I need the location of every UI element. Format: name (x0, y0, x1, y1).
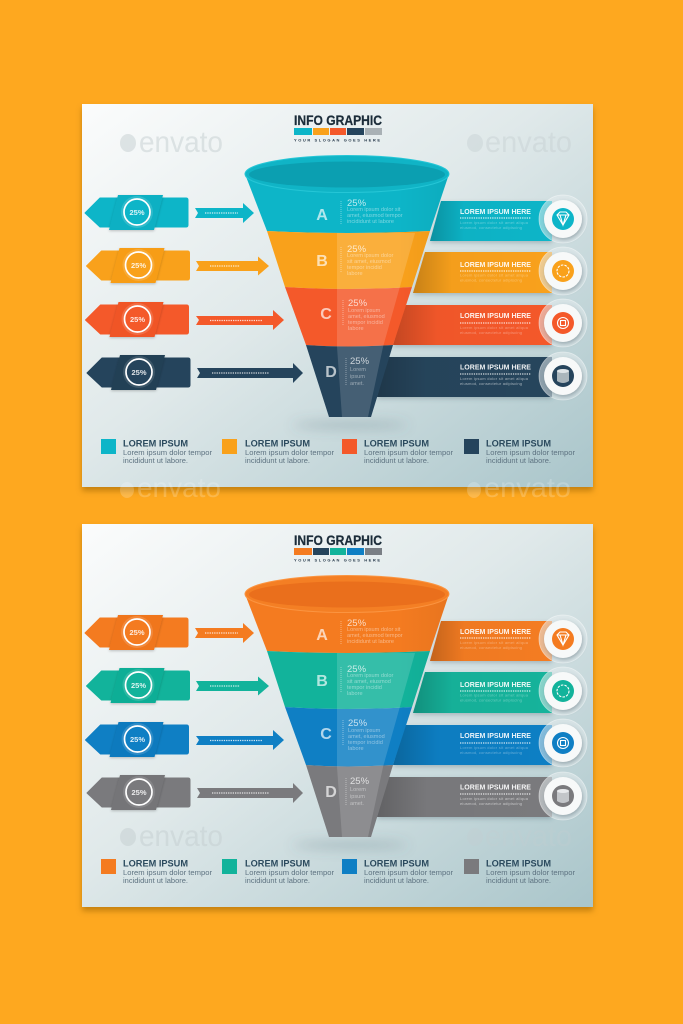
funnel text D: D (325, 364, 337, 381)
legend item 4: incididunt ut labore. (486, 458, 551, 465)
legend item 3: LOREM IPSUM (364, 858, 429, 870)
funnel text C: Lorem ipsum (348, 308, 381, 314)
funnel text A: amet, eiusmod tempor (347, 633, 403, 639)
funnel text C: C (320, 306, 332, 323)
funnel (245, 156, 449, 417)
funnel text A: Lorem ipsum dolor sit (347, 207, 401, 213)
watermark: left: envato (139, 126, 223, 159)
legend item 2: incididunt ut labore. (245, 458, 310, 465)
legend item 4: LOREM IPSUM (486, 438, 551, 450)
title: YOUR SLOGAN GOES HERE (294, 558, 380, 562)
funnel text A: A (316, 627, 328, 644)
right bar A: eiusmod, consectetur adipiscing (460, 225, 522, 230)
funnel right edge shading (245, 594, 449, 837)
right bar A: LOREM IPSUM HERE (460, 629, 531, 636)
right bar A (430, 201, 552, 241)
funnel text A (316, 198, 403, 225)
icon: gear (539, 247, 587, 295)
right bar B: LOREM IPSUM HERE (460, 682, 531, 689)
left tag A: 25% (129, 628, 145, 637)
right bar B: Lorem ipsum dolor sit amet aliqua (460, 272, 529, 278)
funnel segment B (267, 231, 430, 289)
left tag C (86, 302, 188, 337)
legend item 4 (464, 438, 576, 465)
legend item 1: Lorem ipsum dolor tempor (123, 870, 213, 877)
funnel text D: ipsum (350, 794, 365, 800)
funnel text B: 25% (347, 244, 367, 255)
funnel text B: 25% (347, 664, 367, 675)
funnel translucent stripe (337, 233, 415, 417)
right bar D: eiusmod, consectetur adipiscing (460, 381, 522, 386)
left tag D: 25% (131, 788, 147, 797)
icon: chat (539, 719, 587, 767)
funnel text D: Lorem (350, 787, 366, 793)
left tag C (86, 722, 188, 757)
funnel text C: amet, eiusmod (348, 314, 385, 320)
funnel text D: Lorem (350, 367, 366, 373)
title (294, 113, 382, 142)
arrow B (196, 256, 269, 276)
funnel text C: tempor incidid (348, 320, 383, 326)
right bar C (393, 725, 552, 765)
legend item 4: LOREM IPSUM (486, 858, 551, 870)
funnel segment C (285, 287, 412, 346)
funnel text A: incididunt ut labore (347, 639, 394, 645)
left tag B: 25% (131, 681, 146, 690)
left tag D (87, 355, 190, 390)
funnel text A: amet, eiusmod tempor (347, 213, 403, 219)
left tag B: 25% (131, 261, 146, 270)
left tag D (87, 775, 190, 810)
icon: diamond (539, 615, 587, 663)
legend item 3 (342, 438, 454, 465)
left tag C: 25% (130, 735, 145, 744)
right bar C: LOREM IPSUM HERE (460, 733, 531, 740)
panel: top infographic (teal, amber, red, navy) (82, 104, 593, 487)
legend item 1: incididunt ut labore. (123, 458, 188, 465)
funnel text C: labore (348, 746, 364, 752)
right bar A: eiusmod, consectetur adipiscing (460, 645, 522, 650)
right bar A: LOREM IPSUM HERE (460, 209, 531, 216)
watermark: right: envato (485, 820, 572, 853)
funnel (245, 576, 449, 837)
legend item 3 (342, 858, 454, 885)
funnel shadow (292, 841, 408, 849)
left tag A (85, 195, 188, 230)
legend item 1: LOREM IPSUM (123, 858, 188, 870)
funnel text B (316, 244, 393, 277)
icon: diamond (539, 195, 587, 243)
arrow D (197, 783, 303, 803)
title: INFO GRAPHIC (294, 113, 382, 128)
watermark at top panel edge: right: envato (484, 472, 571, 503)
legend item 1 (101, 858, 213, 885)
funnel text C: Lorem ipsum (348, 728, 381, 734)
funnel text B: Lorem ipsum dolor (347, 253, 393, 259)
legend item 4: Lorem ipsum dolor tempor (486, 870, 576, 877)
right bar D (377, 357, 552, 397)
funnel text A (316, 618, 403, 645)
arrow C (196, 730, 284, 750)
right bar C: eiusmod, consectetur adipiscing (460, 330, 522, 335)
right bar D: eiusmod, consectetur adipiscing (460, 801, 522, 806)
funnel text A: Lorem ipsum dolor sit (347, 627, 401, 633)
panel background (82, 524, 593, 907)
funnel text B: tempor incidid (347, 265, 382, 271)
panel: bottom infographic (orange, green, blue, grey) (82, 524, 593, 907)
legend item 4: incididunt ut labore. (486, 878, 551, 885)
watermark: right: envato (485, 126, 572, 159)
legend item 1: incididunt ut labore. (123, 878, 188, 885)
legend item 2: incididunt ut labore. (245, 878, 310, 885)
funnel opening (249, 162, 445, 188)
right bar C: Lorem ipsum dolor sit amet aliqua (460, 745, 529, 750)
legend item 2: Lorem ipsum dolor tempor (245, 870, 335, 877)
legend item 1: Lorem ipsum dolor tempor (123, 450, 213, 457)
funnel text C: tempor incidid (348, 740, 383, 746)
right bar D: Lorem ipsum dolor sit amet aliqua (460, 796, 529, 801)
funnel text C (320, 718, 385, 752)
panel background (82, 104, 593, 487)
left tag B (86, 248, 190, 283)
funnel text D: amet. (350, 801, 364, 807)
funnel right edge shading (245, 174, 449, 417)
legend item 4 (464, 858, 576, 885)
arrow B (196, 676, 269, 696)
funnel text B: B (316, 253, 328, 270)
funnel segment B (267, 651, 430, 709)
funnel opening (249, 582, 445, 608)
legend item 3: LOREM IPSUM (364, 438, 429, 450)
icon: cylinder (539, 772, 587, 820)
funnel segment D (306, 765, 393, 837)
right bar B: Lorem ipsum dolor sit amet aliqua (460, 692, 529, 698)
icon: cylinder (539, 352, 587, 400)
funnel text D: 25% (350, 356, 370, 367)
funnel rim (245, 576, 449, 612)
funnel text D (325, 356, 370, 387)
funnel text C: C (320, 726, 332, 743)
left tag D: 25% (131, 368, 147, 377)
funnel text C: amet, eiusmod (348, 734, 385, 740)
legend item 2 (222, 438, 335, 465)
funnel text A: 25% (347, 198, 367, 209)
right bar B: LOREM IPSUM HERE (460, 262, 531, 269)
legend item 3: Lorem ipsum dolor tempor (364, 870, 454, 877)
funnel shadow (292, 421, 408, 429)
right bar C: LOREM IPSUM HERE (460, 313, 531, 320)
funnel text B: sit amet, eiusmod (347, 679, 391, 685)
arrow A (195, 623, 254, 643)
legend item 3: incididunt ut labore. (364, 458, 429, 465)
right bar C (393, 305, 552, 345)
legend item 2: LOREM IPSUM (245, 858, 310, 870)
funnel text B: tempor incidid (347, 685, 382, 691)
funnel text C (320, 298, 385, 332)
arrow D (197, 363, 303, 383)
funnel segment A (245, 174, 449, 233)
right bar C: Lorem ipsum dolor sit amet aliqua (460, 325, 529, 330)
funnel text D: ipsum (350, 374, 365, 380)
right bar B (413, 252, 552, 293)
funnel text B: labore (347, 691, 363, 697)
funnel text B: labore (347, 271, 363, 277)
funnel segment D (306, 345, 393, 417)
icon: gear (539, 667, 587, 715)
funnel text C: 25% (348, 298, 368, 309)
funnel text D: 25% (350, 776, 370, 787)
right bar C: eiusmod, consectetur adipiscing (460, 750, 522, 755)
right bar A: Lorem ipsum dolor sit amet aliqua (460, 640, 529, 645)
title: INFO GRAPHIC (294, 533, 382, 548)
funnel text C: 25% (348, 718, 368, 729)
funnel text B (316, 664, 393, 697)
legend item 2 (222, 858, 335, 885)
funnel text A: incididunt ut labore (347, 219, 394, 225)
left tag B (86, 668, 190, 703)
right bar A: Lorem ipsum dolor sit amet aliqua (460, 220, 529, 225)
title: YOUR SLOGAN GOES HERE (294, 138, 380, 142)
funnel segment C (285, 707, 412, 766)
watermark at top panel edge: left: envato (137, 472, 221, 503)
funnel segment A (245, 594, 449, 653)
right bar D: LOREM IPSUM HERE (460, 784, 531, 792)
right bar D (377, 777, 552, 817)
funnel text A: A (316, 207, 328, 224)
right bar B: eiusmod, consectetur adipiscing (460, 698, 522, 702)
funnel text D (325, 776, 370, 807)
funnel text B: Lorem ipsum dolor (347, 673, 393, 679)
arrow A (195, 203, 254, 223)
funnel text B: B (316, 673, 328, 690)
icon: chat (539, 299, 587, 347)
funnel text C: labore (348, 326, 364, 332)
legend item 3: Lorem ipsum dolor tempor (364, 450, 454, 457)
legend item 2: Lorem ipsum dolor tempor (245, 450, 335, 457)
legend item 1: LOREM IPSUM (123, 438, 188, 450)
right bar A (430, 621, 552, 661)
right bar D: LOREM IPSUM HERE (460, 364, 531, 372)
legend item 1 (101, 438, 213, 465)
left tag A: 25% (129, 208, 145, 217)
funnel text D: D (325, 784, 337, 801)
legend item 3: incididunt ut labore. (364, 878, 429, 885)
left tag C: 25% (130, 315, 145, 324)
right bar B: eiusmod, consectetur adipiscing (460, 278, 522, 282)
funnel text B: sit amet, eiusmod (347, 259, 391, 265)
legend item 4: Lorem ipsum dolor tempor (486, 450, 576, 457)
funnel text D: amet. (350, 381, 364, 387)
funnel rim (245, 156, 449, 192)
watermark: left: envato (139, 820, 223, 853)
title (294, 533, 382, 562)
funnel text A: 25% (347, 618, 367, 629)
right bar B (413, 672, 552, 713)
right bar D: Lorem ipsum dolor sit amet aliqua (460, 376, 529, 381)
arrow C (196, 310, 284, 330)
left tag A (85, 615, 188, 650)
funnel translucent stripe (337, 653, 415, 837)
legend item 2: LOREM IPSUM (245, 438, 310, 450)
